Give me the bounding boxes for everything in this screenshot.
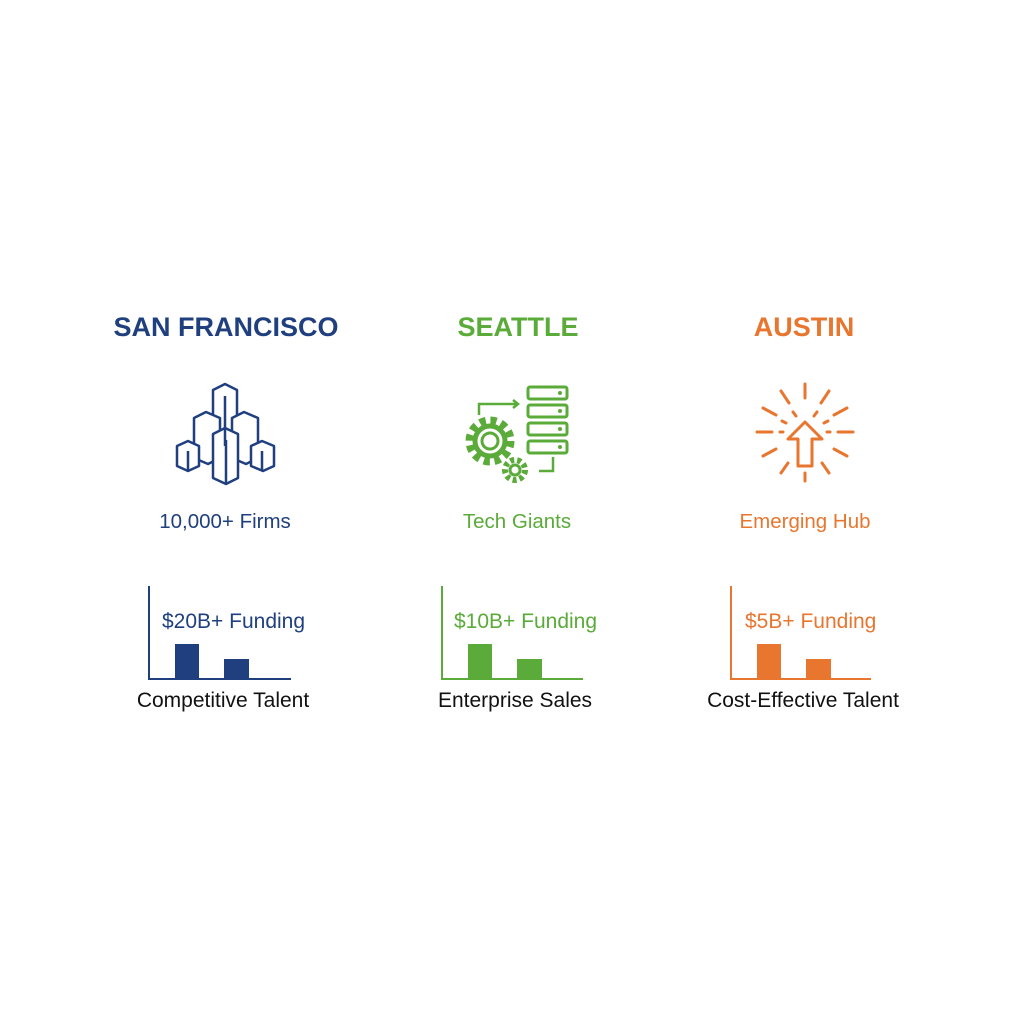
label: firms: 10,000+ Firms <box>159 510 291 533</box>
title: Seattle: SEATTLE <box>458 312 578 342</box>
icon: buildings <box>177 384 274 484</box>
label: emerging hub: Emerging Hub <box>739 510 871 533</box>
chart Austin <box>730 586 871 680</box>
bottom label Austin: Cost-Effective Talent <box>707 689 899 712</box>
label: tech giants: Tech Giants <box>463 510 571 533</box>
funding Seattle: $10B+ Funding <box>454 610 597 633</box>
chart Seattle <box>441 586 583 680</box>
bottom label SF: Competitive Talent <box>137 689 309 712</box>
bottom label Seattle: Enterprise Sales <box>438 689 592 712</box>
chart SF <box>148 586 291 680</box>
icon: arrow burst <box>757 384 853 481</box>
icon: gears and servers <box>470 387 567 480</box>
title: Austin: AUSTIN <box>754 312 854 342</box>
funding Austin: $5B+ Funding <box>745 610 876 633</box>
title: San Francisco: SAN FRANCISCO <box>113 312 339 342</box>
funding SF: $20B+ Funding <box>162 610 305 633</box>
